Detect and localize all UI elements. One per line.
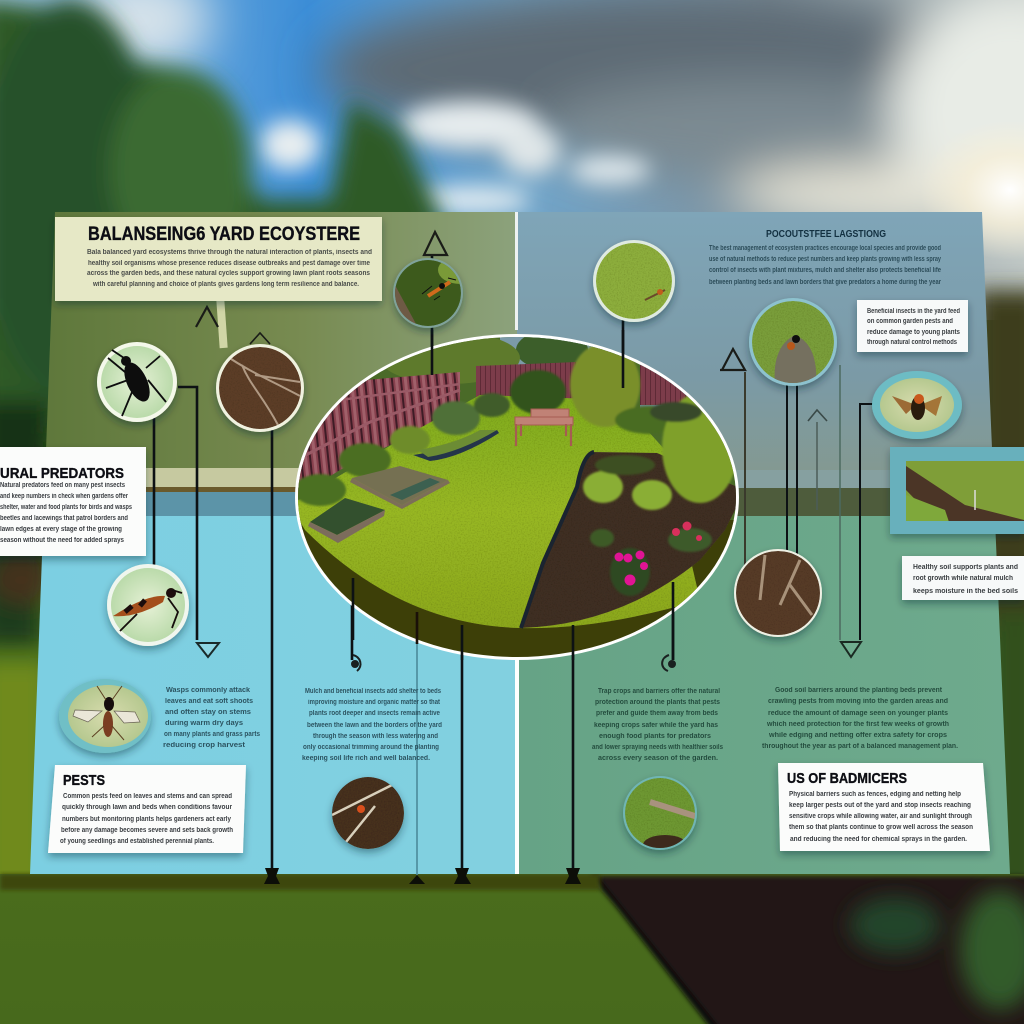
text block: centre right — [592, 688, 723, 762]
icon: grass with stake circle — [623, 776, 698, 855]
text block: centre left: between the lawn and the borders of the yard — [307, 722, 442, 729]
top right heading and text: control of insects with plant mixtures, mulch and shelter also protects beneficial life — [709, 267, 941, 274]
panel: use of barriers: sensitive crops while allowing water, air and sunlight through — [789, 813, 972, 820]
icon: soil with sticks circle — [734, 549, 822, 637]
panel: use of barriers: US OF BADMICERS — [787, 770, 907, 787]
white frame — [295, 334, 739, 660]
arrow: faint up — [808, 410, 827, 421]
callout: right small box: on common garden pests and — [867, 318, 953, 325]
line overlays on garden — [353, 330, 673, 660]
text block: far right: which need protection for the first few weeks of growth — [766, 721, 949, 728]
infographic panel — [20, 212, 1017, 875]
panel: use of barriers: and reducing the need for chemical sprays in the garden. — [790, 836, 967, 843]
callout: right lower box: Healthy soil supports plants and — [913, 564, 1018, 571]
text block: centre right: protection around the plants that pests — [595, 699, 720, 706]
icon: wasp oval — [872, 371, 962, 439]
icon: grass and mound circle — [749, 298, 837, 390]
connector lines — [154, 256, 880, 875]
icon: beetle circle — [97, 342, 177, 422]
flowers — [614, 522, 702, 586]
top right heading and text — [709, 229, 941, 286]
text block: centre right: enough food plants for predators — [599, 733, 711, 740]
raised bed: back — [413, 430, 499, 461]
text block: centre left: improving moisture and organic matter so that — [308, 699, 441, 706]
text block: centre right: keeping crops safer while the yard has — [594, 722, 718, 729]
text block: centre right: and lower spraying needs with healthier soils — [592, 744, 723, 751]
panel: pests: of young seedlings and established perennial plants. — [60, 838, 214, 845]
text block: centre right: Trap crops and barriers offer the natural — [598, 688, 720, 695]
callout: right small box: Beneficial insects in the yard feed — [867, 308, 960, 315]
panel: use of barriers: keep larger pests out of the yard and stop insects reaching — [789, 802, 971, 809]
text block: far right: throughout the year as part of a balanced management plan. — [762, 743, 958, 750]
text block: centre left: only occasional trimming around the planting — [303, 744, 439, 751]
icon: grass circle — [593, 240, 675, 322]
intro text: with careful planning and choice of plants gives gardens long term resilience and balance. — [92, 281, 359, 288]
callout: right small box: reduce damage to young plants — [867, 329, 960, 336]
icon: orange insect circle — [107, 564, 189, 646]
intro text: healthy soil organisms whose presence reduces disease outbreaks and pest damage over time — [88, 260, 370, 267]
callout: right small box: through natural control methods — [867, 339, 957, 346]
icon: soil roots circle — [216, 344, 304, 432]
shrubs — [294, 343, 738, 596]
panel: natural predators: Natural predators feed on many pest insects — [0, 482, 125, 489]
callout: right small box — [857, 300, 968, 352]
garden lower rim — [300, 520, 734, 657]
panel: natural predators: lawn edges at every stage of the growing — [0, 526, 122, 533]
text block: far right — [762, 687, 958, 750]
top right heading and text: The best management of ecosystem practices encourage local species and provide good — [709, 245, 941, 252]
text block: left lower: on many plants and grass parts — [164, 731, 260, 738]
panel: use of barriers — [778, 763, 990, 851]
text block: left lower: reducing crop harvest — [163, 742, 246, 749]
panel: bottom left blue — [20, 515, 517, 875]
text block: centre left — [302, 688, 442, 762]
text block: centre right: prefer and guide them away from beds — [596, 710, 718, 717]
icon: top bug circle — [389, 258, 467, 336]
panel: use of barriers: them so that plants continue to grow well across the season — [789, 824, 973, 831]
arrow: up top left — [424, 232, 447, 255]
text block: left lower: Wasps commonly attack — [166, 687, 250, 694]
top right heading and text: between planting beds and lawn borders that give predators a home during the year — [709, 279, 941, 286]
intro text: across the garden beds, and these natural cycles support growing lawn plant roots seasons — [87, 270, 370, 277]
raised bed: middle — [350, 466, 450, 509]
text block: far right: reduce the amount of damage seen on younger plants — [768, 710, 948, 717]
title box — [55, 217, 382, 301]
central garden illustration — [290, 330, 750, 670]
text block: centre left: keeping soil life rich and well balanced. — [302, 755, 430, 762]
panel: natural predators: beetles and lacewings that patrol borders and — [0, 515, 128, 522]
panel: natural predators: shelter, water and food plants for birds and wasps — [0, 504, 132, 511]
text block: left lower — [163, 687, 260, 749]
picture: garden bed thumbnail — [890, 447, 1024, 534]
panel: natural predators — [0, 447, 146, 556]
panel: pests: numbers but monitoring plants helps gardeners act early — [62, 816, 231, 823]
garden trees backdrop — [290, 330, 750, 530]
text block: left lower: and often stay on stems — [165, 709, 251, 716]
arrow: up left — [196, 307, 218, 327]
text block: left lower: during warm dry days — [165, 720, 243, 727]
bed edging — [521, 452, 594, 628]
panel: top right blue grey — [517, 212, 992, 470]
lawn — [290, 395, 700, 628]
raised bed: front — [308, 498, 385, 543]
panel: pests: PESTS — [63, 772, 105, 789]
text block: centre right: across every season of the garden. — [598, 755, 718, 762]
title: BALANSEING6 YARD ECOYSTERE — [88, 224, 360, 245]
text block: far right: while edging and netting offer extra safety for crops — [768, 732, 947, 739]
arrow: down right — [841, 642, 861, 657]
arrow: small up — [250, 333, 270, 344]
text block: centre left: plants root deeper and insects remain active — [309, 710, 440, 717]
hook markers — [352, 655, 675, 671]
panel: natural predators: URAL PREDATORS — [0, 466, 124, 482]
garden fences — [290, 362, 690, 500]
callout: right lower box — [902, 556, 1024, 600]
panel: natural predators: season without the need for added sprays — [0, 537, 124, 544]
arrow: up right — [720, 349, 745, 370]
panel: pests: before any damage becomes severe and sets back growth — [61, 827, 233, 834]
centre divider — [515, 212, 519, 874]
arrow markers — [196, 232, 861, 884]
panel: top left olive — [46, 212, 517, 468]
panel: pests — [48, 765, 246, 853]
panel: pests: quickly through lawn and beds when conditions favour — [62, 804, 232, 811]
text block: left lower: leaves and eat soft shoots — [165, 698, 253, 705]
arrow: down left — [197, 643, 219, 657]
panel: use of barriers: Physical barriers such as fences, edging and netting help — [789, 791, 961, 798]
icon: winged insect oval — [59, 679, 151, 753]
panel: natural predators: and keep numbers in check when gardens offer — [0, 493, 128, 500]
intro text: Bala balanced yard ecosystems thrive through the natural interaction of plants, insects and — [87, 249, 372, 256]
icon: soil with insect circle — [332, 777, 404, 849]
panel: bottom right green — [517, 515, 1017, 875]
text block: far right: crawling pests from moving into the garden areas and — [768, 698, 948, 705]
middle band — [146, 468, 890, 516]
top right heading and text: POCOUTSTFEE LAGSTIONG — [766, 229, 886, 240]
callout: right lower box: keeps moisture in the bed soils — [913, 588, 1018, 595]
text block: far right: Good soil barriers around the planting beds prevent — [775, 687, 943, 694]
panel: pests: Common pests feed on leaves and stems and can spread — [63, 793, 232, 800]
callout: right lower box: root growth while natural mulch — [913, 575, 1013, 582]
bench — [515, 409, 573, 446]
text block: centre left: through the season with less watering and — [313, 733, 438, 740]
soil bed — [520, 452, 745, 628]
intro text — [87, 249, 372, 288]
foot markers — [264, 868, 581, 884]
text block: centre left: Mulch and beneficial insects add shelter to beds — [305, 688, 441, 695]
top right heading and text: use of natural methods to reduce pest numbers and keep plants growing with less spray — [709, 256, 941, 263]
